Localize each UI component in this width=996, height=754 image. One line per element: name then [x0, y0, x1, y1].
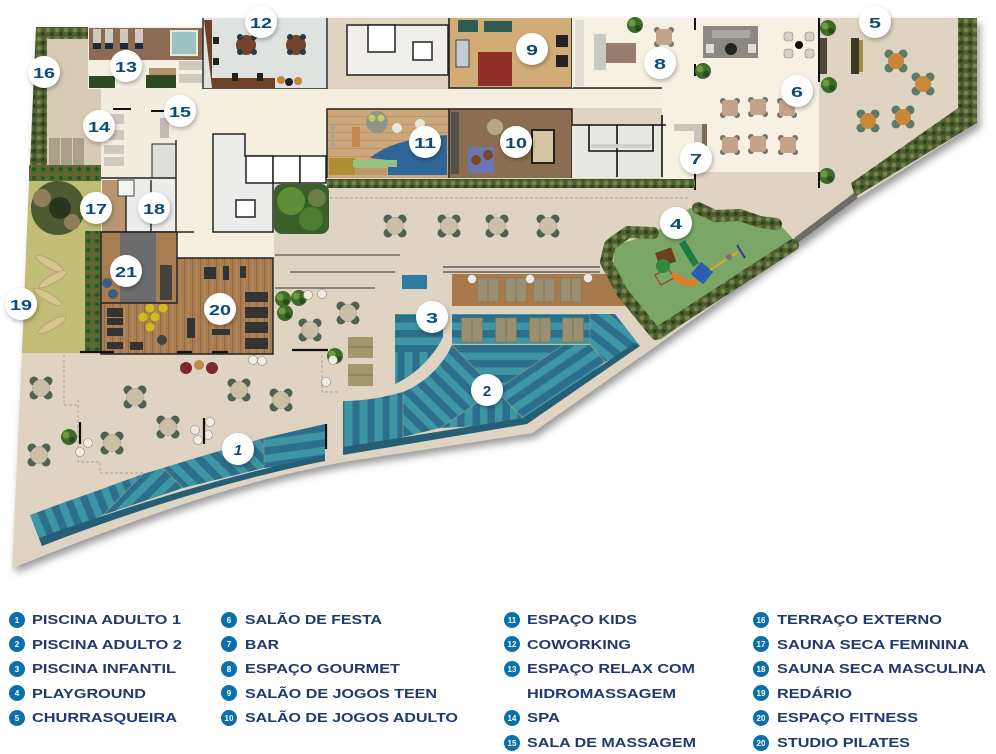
ramps and steps — [275, 255, 600, 288]
legend badge numbers: 15 — [508, 739, 517, 748]
panel: salão de jogos teen 9 — [449, 18, 572, 88]
bar counter — [674, 124, 707, 154]
site floor plan — [5, 6, 977, 568]
dashed paving lines — [64, 198, 690, 473]
legend labels: TERRAÇO EXTERNO — [777, 612, 942, 627]
number labels: 2 — [483, 383, 491, 400]
panel: garden 16 green border — [30, 27, 88, 165]
planting: tropical garden — [274, 184, 329, 234]
legend labels: COWORKING — [527, 637, 631, 652]
deck loungers — [468, 274, 592, 302]
legend labels: ESPAÇO KIDS — [527, 612, 637, 627]
black low walls — [80, 350, 328, 449]
legend badge numbers — [15, 616, 766, 748]
legend labels: SAUNA SECA MASCULINA — [777, 661, 987, 676]
legend labels: SALÃO DE FESTA — [245, 612, 383, 627]
legend badge numbers: 3 — [15, 665, 20, 674]
panel: salão de festa and gourmet — [572, 18, 819, 179]
redário hammocks — [32, 253, 69, 336]
number labels: 8 — [654, 56, 666, 73]
legend badge numbers: 19 — [757, 689, 766, 698]
legend labels: PISCINA ADULTO 1 — [32, 612, 181, 627]
panel: terraço externo 16 — [47, 39, 101, 165]
number labels: 21 — [115, 264, 137, 281]
number labels: 13 — [115, 59, 137, 76]
party tables — [720, 97, 798, 155]
legend badge numbers: 16 — [757, 616, 766, 625]
legend badge numbers: 18 — [757, 665, 766, 674]
number labels: 19 — [10, 297, 32, 314]
panel: stair block top — [347, 25, 448, 75]
legend labels: ESPAÇO RELAX COM — [527, 661, 695, 676]
legend badge numbers: 6 — [227, 616, 232, 625]
legend labels: ESPAÇO FITNESS — [777, 710, 918, 725]
gourmet kitchen table — [575, 20, 674, 86]
legend badge numbers: 13 — [508, 665, 517, 674]
legend badge numbers: 20 — [757, 714, 766, 723]
number labels: 18 — [143, 201, 165, 218]
legend badge numbers: 10 — [225, 714, 234, 723]
panel: restrooms — [572, 115, 666, 178]
legend badge numbers: 1 — [15, 616, 20, 625]
legend labels: SAUNA SECA FEMININA — [777, 637, 970, 652]
legend badge numbers: 4 — [15, 689, 20, 698]
legend badge numbers: 8 — [227, 665, 232, 674]
hedge beside redário — [85, 231, 102, 353]
legend badge numbers: 20 — [757, 739, 766, 748]
legend labels: CHURRASQUEIRA — [32, 710, 178, 725]
number labels: 20 — [209, 302, 231, 319]
legend — [9, 612, 987, 751]
legend labels: PISCINA INFANTIL — [32, 661, 176, 676]
legend labels: BAR — [245, 637, 280, 652]
indoor plants — [627, 17, 837, 184]
number labels: 11 — [414, 135, 436, 152]
lower terrace tables — [28, 302, 360, 466]
panel: studio pilates 20 — [101, 232, 273, 354]
legend labels: PLAYGROUND — [32, 686, 146, 701]
panel: salão de jogos adulto 10 — [449, 109, 572, 178]
number labels: 16 — [33, 65, 55, 82]
panel: saunas 17 and 18 — [101, 140, 194, 232]
number labels: 12 — [250, 15, 272, 32]
number markers — [5, 6, 891, 465]
hedge under terrace — [29, 165, 101, 181]
panel: elevator and stair core — [213, 134, 326, 232]
legend labels: ESPAÇO GOURMET — [245, 661, 400, 676]
legend labels: STUDIO PILATES — [777, 735, 910, 750]
legend labels: PISCINA ADULTO 2 — [32, 637, 182, 652]
number labels: 4 — [670, 216, 683, 233]
poolside loungers — [348, 337, 373, 386]
number labels — [10, 15, 881, 459]
panel: coworking 12 — [203, 18, 327, 89]
panel: main corridor — [101, 89, 662, 258]
legend labels: SALÃO DE JOGOS ADULTO — [245, 710, 458, 725]
number labels: 14 — [88, 119, 111, 136]
legend labels: SALA DE MASSAGEM — [527, 735, 696, 750]
legend badge numbers: 14 — [508, 714, 517, 723]
legend labels: SALÃO DE JOGOS TEEN — [245, 686, 437, 701]
legend badge numbers: 7 — [227, 640, 232, 649]
number labels: 17 — [85, 201, 107, 218]
right perimeter hedge — [851, 18, 977, 197]
chart: pool 2 — [343, 314, 640, 455]
service edge strip — [794, 193, 858, 243]
legend badge numbers: 2 — [15, 640, 20, 649]
hedge along interior — [327, 179, 695, 188]
legend labels: REDÁRIO — [777, 686, 852, 701]
number labels: 7 — [690, 151, 702, 168]
number labels: 5 — [869, 15, 881, 32]
panel: redário 19 — [22, 181, 101, 353]
terrace paving — [12, 18, 977, 568]
churrasqueira tables — [856, 50, 934, 132]
legend labels: HIDROMASSAGEM — [527, 686, 676, 701]
icon: terrace loungers — [49, 138, 84, 165]
number labels: 15 — [169, 104, 191, 121]
legend labels — [32, 612, 987, 750]
panel: espaço kids 11 — [327, 109, 449, 178]
legend badge numbers: 9 — [227, 689, 232, 698]
legend badge numbers: 17 — [757, 640, 766, 649]
number labels: 3 — [426, 310, 438, 327]
chart: pool 1 — [30, 424, 325, 546]
legend badge numbers: 5 — [15, 714, 20, 723]
number labels: 9 — [526, 42, 538, 59]
planting: garden pots — [61, 290, 343, 456]
number labels: 10 — [505, 135, 527, 152]
number labels: 6 — [791, 84, 803, 101]
chart: pool 3 — [395, 314, 443, 384]
panel: deck beside pool — [452, 274, 627, 306]
terrace tables upper — [384, 214, 560, 238]
mini pool — [402, 275, 427, 289]
pool loungers — [462, 318, 584, 342]
planting: redário tree — [31, 181, 85, 235]
legend badge numbers: 11 — [508, 616, 517, 625]
panel: espaço fitness 21 — [101, 232, 177, 303]
panel: espaço relax 13 — [88, 27, 203, 89]
legend labels: SPA — [527, 710, 561, 725]
panel: spa 14 — [101, 90, 176, 178]
red armchairs — [180, 360, 218, 374]
legend badge numbers: 12 — [508, 640, 517, 649]
legend badges — [9, 612, 769, 751]
number labels: 1 — [234, 442, 242, 459]
churrasqueira counter — [695, 18, 863, 190]
panel: playground 4 — [606, 208, 797, 340]
